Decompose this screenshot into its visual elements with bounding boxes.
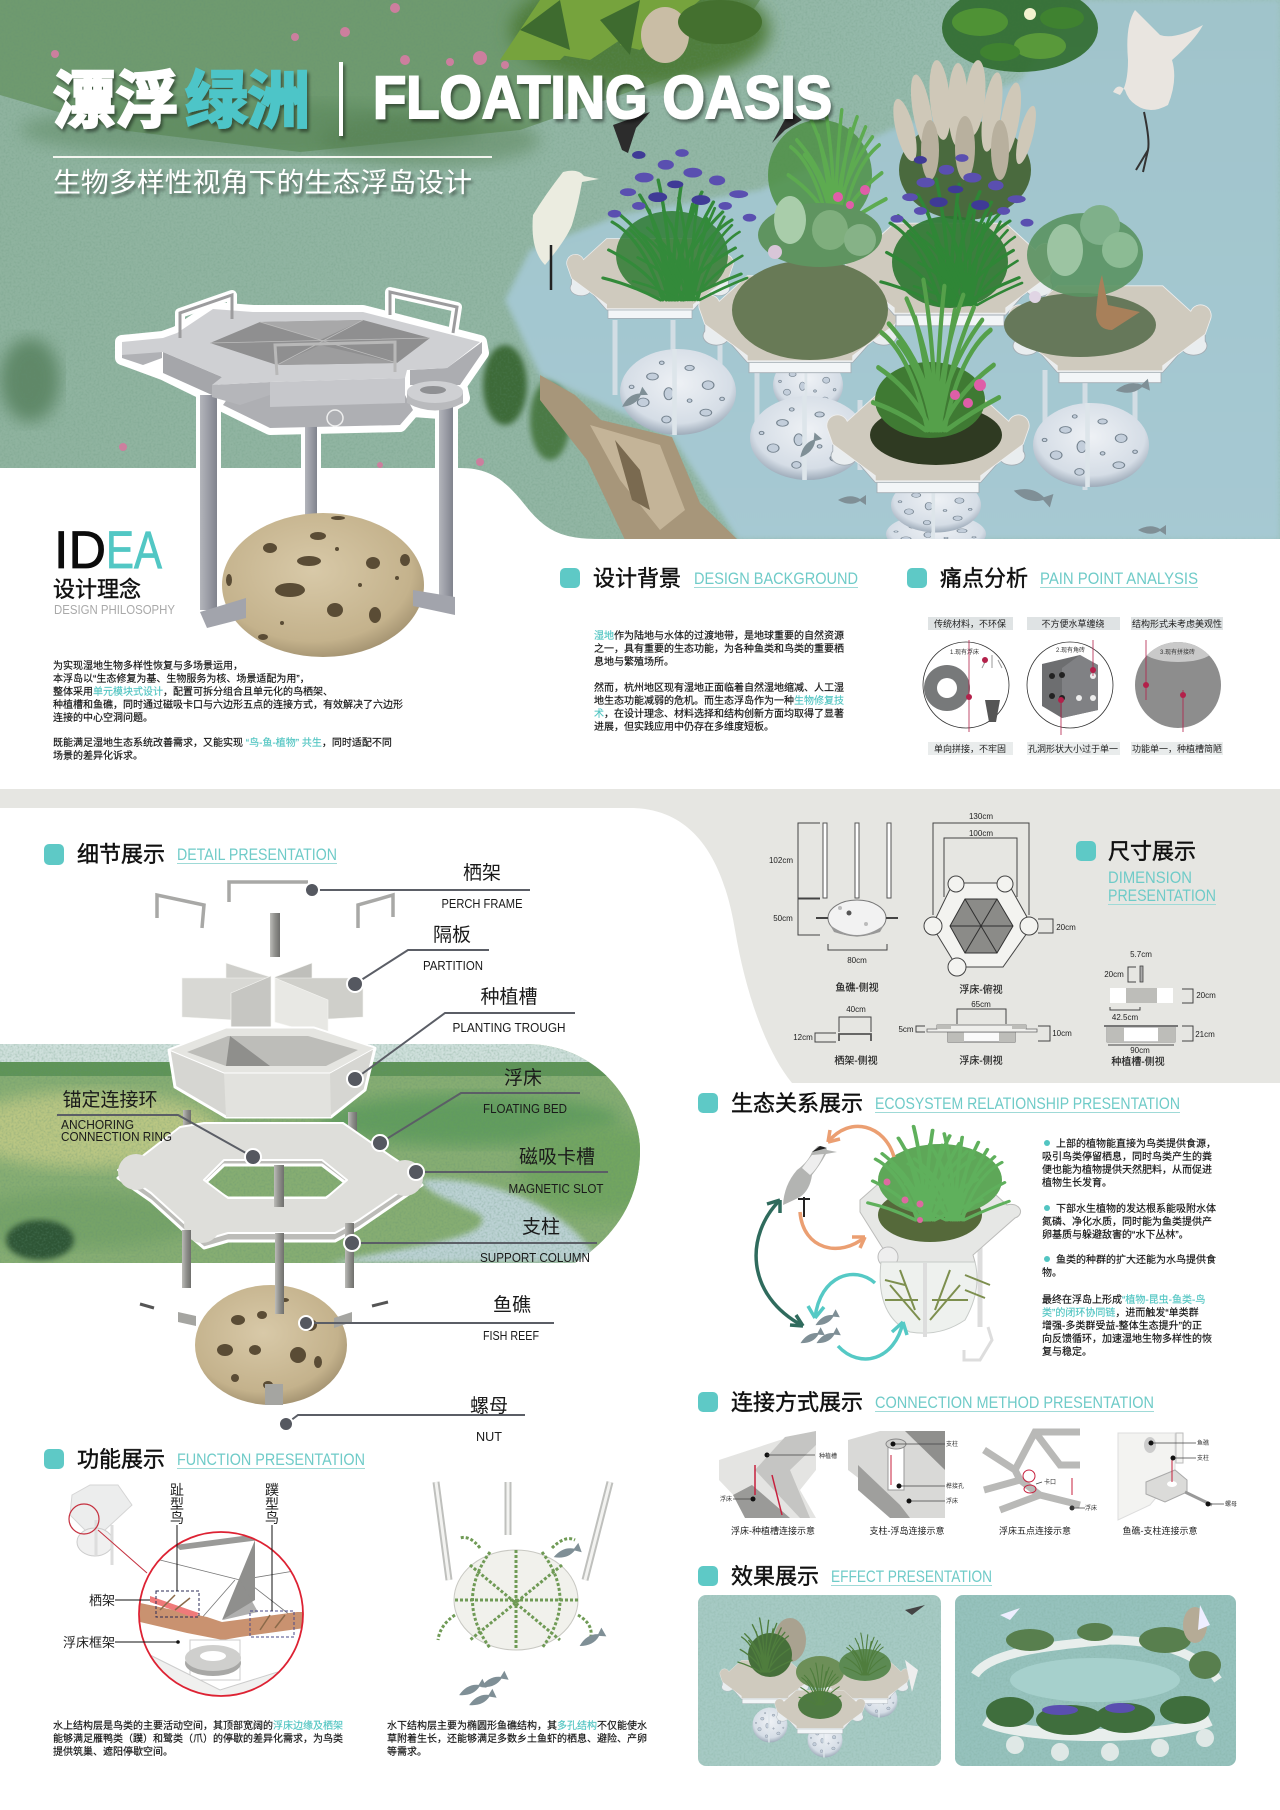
- text block: 之一，具有重要的生态功能，为各种鱼类和鸟类的重要栖: [594, 642, 844, 655]
- drawing: planting trough side view: 90cm: [1130, 1046, 1150, 1055]
- panel: dimensions: [769, 812, 1216, 1068]
- icon: pampas grass: [889, 59, 1040, 220]
- arrow: teal lower: [838, 1322, 907, 1359]
- drawing: planting trough side view: [1104, 950, 1216, 1068]
- exploded: upper pins: [183, 1110, 357, 1150]
- label: anchoring ring: CONNECTION RING: [61, 1129, 172, 1144]
- text block: concept: 本浮岛以“生态修复为基、生物服务为核、场景适配为用”，: [53, 672, 310, 685]
- diagram: reef to column: 螺母: [1225, 1500, 1237, 1508]
- drawing: floating bed side view: 65cm: [971, 1000, 991, 1009]
- icon: swallow birds: [613, 110, 802, 153]
- text block: ecosystem: [1042, 1137, 1216, 1358]
- text block: under water: [387, 1719, 647, 1758]
- image: effect view 1: [698, 1595, 941, 1766]
- icon: pink meadow flowers: [51, 3, 509, 468]
- text block: above water: 能够满足雁鸭类（蹼）和鹭类（爪）的停歇的差异化需求，为鸟类: [53, 1732, 343, 1745]
- label: anchoring ring: 锚定连接环: [62, 1089, 158, 1111]
- diagram: five-point connection: 浮床五点连接示意: [999, 1525, 1071, 1536]
- drawing: floating bed top view: 浮床-俯视: [959, 983, 1003, 996]
- diagram: ecosystem cycle: [756, 1126, 1021, 1360]
- pain point 3: 3.现有拼接砖: [1160, 648, 1195, 656]
- panel: effect presentation: [698, 1564, 1236, 1766]
- label: magnetic slot: MAGNETIC SLOT: [508, 1181, 604, 1196]
- label: toe-type bird: 趾: [170, 1482, 184, 1498]
- ring lobe: [407, 392, 463, 410]
- arrow: teal upper: [808, 1274, 875, 1318]
- label: toe-type bird: 鸟: [170, 1510, 184, 1526]
- drawing: perch side view: 40cm: [846, 1005, 866, 1014]
- icon: section marker: [1076, 841, 1096, 861]
- diagram: bed to trough: 浮床: [720, 1495, 732, 1503]
- text block: above water: 提供筑巢、遮阳停歇空间。: [53, 1745, 173, 1758]
- drawing: perch side view: 12cm: [793, 1033, 813, 1042]
- drawing: floating bed top view: 130cm: [969, 812, 993, 821]
- icon: planter: [860, 1185, 1021, 1262]
- heading english: PRESENTATION: [1108, 886, 1216, 905]
- heading english: ECOSYSTEM RELATIONSHIP PRESENTATION: [875, 1094, 1180, 1113]
- text block: ecosystem: 植物生长发育。: [1042, 1176, 1112, 1189]
- heading english: [1108, 868, 1216, 905]
- icon: section marker: [907, 568, 927, 588]
- icon: canna plants at top: [500, 0, 762, 63]
- text block: concept: 种植槽和鱼礁，同时通过磁吸卡口与六边形五点的连接方式，有效解决了六边形: [53, 698, 403, 711]
- diagram: small model: [69, 1485, 147, 1573]
- heading: 细节展示: [77, 842, 165, 867]
- title: 漂浮: [53, 67, 178, 136]
- text block: 术，在设计理念、材料选择和结构创新方面均取得了显著: [594, 707, 844, 720]
- plants and modules: [567, 59, 1211, 554]
- icon: iris plant 2: [892, 216, 1008, 308]
- icon: taro right and ground: [1004, 293, 1156, 357]
- label: web-type bird: 鸟: [265, 1510, 279, 1526]
- title: [53, 62, 832, 136]
- text block: ecosystem: 增强-多类群受益-整体生态提升”的正: [1042, 1319, 1202, 1332]
- white halo: [122, 309, 482, 428]
- label: support column: SUPPORT COLUMN: [480, 1250, 590, 1265]
- text block: ecosystem: 氮磷、净化水质，同时能为鱼类提供产: [1042, 1215, 1212, 1228]
- fish reef: [222, 513, 424, 657]
- label: nut: 螺母: [470, 1395, 508, 1417]
- panel: connection methods: [698, 1390, 1237, 1536]
- heading: 连接方式展示: [731, 1390, 863, 1415]
- subheading: DESIGN PHILOSOPHY: [54, 602, 175, 617]
- heading: IDEA: [54, 521, 163, 580]
- text block: concept: 为实现湿地生物多样性恢复与多场景运用，: [53, 659, 243, 672]
- label: floating bed: FLOATING BED: [483, 1101, 567, 1116]
- text block: under water: 草附着生长，还能够满足多数乡土鱼虾的栖息、避险、产卵: [387, 1732, 647, 1745]
- text block: 息地与繁殖场所。: [594, 655, 674, 668]
- pain point 1: 传统材料，不环保: [934, 618, 1006, 629]
- icon: front planter: [827, 396, 1029, 493]
- label: web-type bird: [265, 1482, 279, 1526]
- icon: section marker: [560, 568, 580, 588]
- heading: 效果展示: [731, 1564, 819, 1589]
- pain point 1: 1.现有浮床: [950, 648, 979, 656]
- icon: heron: [783, 1146, 837, 1205]
- diagram: reef to column: 支柱: [1197, 1454, 1209, 1462]
- icon: rear floats: [615, 320, 1135, 490]
- icon: water lily pads: [942, 0, 1098, 72]
- diagram: five-point connection: 浮床: [1085, 1504, 1097, 1512]
- text block: ecosystem: 鱼类的种群的扩大还能为水鸟提供食: [1056, 1253, 1216, 1266]
- icon: section marker: [44, 844, 64, 865]
- heading english: DESIGN BACKGROUND: [694, 569, 858, 588]
- pain point 3: 功能单一，种植槽简陋: [1132, 743, 1222, 754]
- pain point 2: [1027, 617, 1120, 755]
- label: planting trough: [347, 986, 575, 1087]
- heading: 功能展示: [77, 1447, 165, 1472]
- panel: detail presentation: [0, 842, 680, 1444]
- drawing: floating bed top view: 20cm: [1056, 923, 1076, 932]
- drawing: floating bed side view: 浮床-侧视: [959, 1054, 1003, 1067]
- text block: concept: 场景的差异化诉求。: [53, 749, 143, 762]
- label: floating bed: 浮床: [504, 1067, 542, 1089]
- drawing: floating bed side view: 5cm: [898, 1025, 914, 1034]
- wetland photo background: [0, 1044, 680, 1264]
- heading: 痛点分析: [940, 566, 1028, 591]
- heading: 生态关系展示: [731, 1091, 863, 1116]
- title: 绿洲: [185, 67, 310, 136]
- icon: egret top right: [1113, 10, 1203, 172]
- drawing: perch side view: [793, 1005, 878, 1067]
- text block: concept: 整体采用单元模块式设计，配置可拆分组合且单元化的鸟栖架、: [53, 685, 333, 698]
- pain point 2: 不方便水草缠绕: [1041, 618, 1105, 629]
- image: effect view 2: [955, 1595, 1236, 1766]
- pain point 2: 2.现有角砖: [1056, 646, 1085, 654]
- label: perch frame: PERCH FRAME: [442, 896, 523, 911]
- text block: concept: 既能满足湿地生态系统改善需求，又能实现 “鸟-鱼-植物” 共生，同时适配不同: [53, 736, 392, 749]
- text block: under water: 水下结构层主要为椭圆形鱼礁结构，其多孔结构不仅能使水: [387, 1719, 647, 1732]
- icon: fish: [622, 386, 648, 407]
- label: planting trough: PLANTING TROUGH: [452, 1020, 566, 1035]
- hero floating unit model: [122, 292, 482, 657]
- label: web-type bird: 蹼: [265, 1482, 279, 1498]
- diagram: reef to column: 鱼礁-支柱连接示意: [1122, 1525, 1198, 1536]
- text block: 地生态功能减弱的危机。而生态浮岛作为一种生物修复技: [594, 694, 844, 707]
- drawing: floating bed side view: [898, 1000, 1072, 1067]
- pain point 1: 单向拼接，不牢固: [934, 743, 1006, 754]
- diagram: bed to trough: 浮床-种植槽连接示意: [731, 1525, 815, 1536]
- icon: reeds and taro middle: [768, 120, 872, 210]
- panel: pain point analysis: [907, 566, 1223, 755]
- panel: function presentation: [44, 1447, 647, 1758]
- text block: [594, 629, 844, 733]
- diagram: underwater reef structure: [436, 1482, 610, 1710]
- panel: dimension background: [0, 789, 1280, 1083]
- diagram: magnified circle: [115, 1525, 305, 1700]
- panel: hero wetland scene: [0, 0, 1280, 554]
- diagram: column to island: [848, 1431, 964, 1536]
- text block: concept: 连接的中心空洞问题。: [53, 711, 153, 724]
- diagram: column to island: 浮床: [946, 1497, 958, 1505]
- exploded: perch frames: [157, 882, 393, 928]
- text block: ecosystem: 吸引鸟类停留栖息，同时鸟类产生的粪: [1042, 1150, 1212, 1163]
- drawing: fish reef side view: 80cm: [847, 956, 867, 965]
- heading english: DIMENSION: [1108, 868, 1192, 887]
- exploded: fish reef: [140, 1284, 388, 1405]
- drawing: floating bed top view: 100cm: [969, 829, 993, 838]
- drawing: planting trough side view: 5.7cm: [1130, 950, 1152, 959]
- drawing: planting trough side view: 42.5cm: [1112, 1013, 1138, 1022]
- diagram: column to island: 支柱-浮岛连接示意: [870, 1525, 944, 1536]
- diagram: column to island: 支柱: [946, 1440, 958, 1448]
- icon: perch rails: [180, 292, 457, 375]
- arrow: orange lower: [800, 1212, 865, 1248]
- arrow: dark green: [756, 1200, 803, 1326]
- text block: 然而，杭州地区现有湿地正面临着自然湿地缩减、人工湿: [594, 681, 844, 694]
- drawing: floating bed top view: [924, 812, 1076, 996]
- drawing: planting trough side view: 种植槽-侧视: [1111, 1055, 1165, 1068]
- text block: 进展，但实践应用中仍存在多维度短板。: [594, 720, 774, 733]
- heading english: EFFECT PRESENTATION: [831, 1567, 992, 1586]
- icon: iris plant 1: [616, 211, 728, 299]
- label: toe-type bird: 型: [170, 1496, 184, 1512]
- text block: ecosystem: 上部的植物能直接为鸟类提供食源，: [1056, 1137, 1216, 1150]
- pain point 3: 结构形式未考虑美观性: [1132, 618, 1222, 629]
- label: nut: NUT: [476, 1429, 502, 1444]
- icon: fish school: [798, 1309, 841, 1347]
- label: anchoring ring: [57, 1089, 261, 1165]
- text block: ecosystem: 最终在浮岛上形成“植物-昆虫-鱼类-鸟: [1042, 1293, 1205, 1306]
- drawing: fish reef side view: 102cm: [769, 856, 793, 865]
- heading english: DETAIL PRESENTATION: [177, 845, 337, 864]
- text block: ecosystem: 类”的闭环协同链，进而触发“单类群: [1042, 1306, 1199, 1319]
- icon: root sphere: [880, 1262, 977, 1333]
- icon: section marker: [698, 1392, 718, 1412]
- drawing: planting trough side view: 20cm: [1196, 991, 1216, 1000]
- drawing: fish reef side view: 50cm: [773, 914, 793, 923]
- label: anchoring ring: ANCHORING: [61, 1117, 134, 1132]
- text block: ecosystem: 下部水生植物的发达根系能吸附水体: [1056, 1202, 1216, 1215]
- heading: 设计理念: 设计理念: [53, 577, 141, 602]
- text block: ecosystem: 物。: [1042, 1266, 1062, 1279]
- text block: above water: [53, 1719, 343, 1758]
- label: support column: [344, 1216, 597, 1265]
- label: magnetic slot: [408, 1146, 608, 1196]
- label: partition: PARTITION: [423, 958, 483, 973]
- diagram: five-point connection: [984, 1432, 1097, 1536]
- icon: section marker: [698, 1093, 718, 1113]
- label: toe-type bird: [170, 1482, 184, 1526]
- text block: above water: 水上结构层是鸟类的主要活动空间，其顶部宽阔的浮床边缘及栖架: [53, 1719, 343, 1732]
- drawing: planting trough side view: 21cm: [1195, 1030, 1215, 1039]
- label: partition: 隔板: [433, 924, 471, 946]
- exploded: partition: [182, 963, 363, 1045]
- exploded: floating bed: [118, 1123, 423, 1248]
- heading: 设计背景: [593, 566, 681, 591]
- pain point 2: 孔洞形状大小过于单一: [1028, 743, 1118, 754]
- text block: under water: 等需求。: [387, 1745, 427, 1758]
- heading english: FUNCTION PRESENTATION: [177, 1450, 365, 1469]
- label: nut: [279, 1395, 525, 1444]
- label: partition: [347, 924, 489, 992]
- text block: ecosystem: 向反馈循环，加速湿地生物多样性的恢: [1042, 1332, 1212, 1345]
- icon: supports: [978, 1243, 982, 1327]
- label: fish reef: FISH REEF: [483, 1328, 539, 1343]
- text block: ecosystem: 复与稳定。: [1042, 1345, 1092, 1358]
- diagram: bed to trough: [719, 1431, 837, 1536]
- icon: anchor blocks: [200, 598, 246, 628]
- panel: idea: [53, 521, 403, 762]
- subtitle: 生物多样性视角下的生态浮岛设计: [53, 168, 472, 198]
- text block: concept: [53, 659, 403, 762]
- label: perch frame: 栖架: [463, 862, 501, 884]
- drawing: planting trough side view: 20cm: [1104, 970, 1124, 979]
- label: planting trough: 种植槽: [480, 986, 538, 1008]
- panel: design background: [560, 566, 858, 733]
- text block: ecosystem: 便也能为植物提供天然肥料，从而促进: [1042, 1163, 1212, 1176]
- drawing: fish reef side view: [769, 823, 898, 994]
- heading english: PAIN POINT ANALYSIS: [1040, 569, 1198, 588]
- label: fish reef: [299, 1294, 554, 1343]
- label: magnetic slot: 磁吸卡槽: [519, 1146, 595, 1168]
- icon: section marker: [698, 1566, 718, 1586]
- exploded: planting trough: [169, 1028, 375, 1117]
- heading: IDEA: EA: [106, 521, 163, 580]
- heading english: CONNECTION METHOD PRESENTATION: [875, 1393, 1154, 1412]
- heading: IDEA: ID: [54, 521, 106, 580]
- text block: 湿地作为陆地与水体的过渡地带，是地球重要的自然资源: [594, 629, 844, 642]
- diagram: bed to trough: 种植槽: [819, 1452, 837, 1460]
- drawing: floating bed side view: 10cm: [1052, 1029, 1072, 1038]
- label: frame: 浮床框架: [63, 1635, 115, 1650]
- text block: ecosystem: 卵基质与躲避敌害的“水下丛林”。: [1042, 1228, 1189, 1241]
- drawing: perch side view: 栖架-侧视: [834, 1054, 878, 1067]
- floating bed: [223, 395, 413, 428]
- label: floating bed: [372, 1067, 580, 1151]
- arrow: orange upper: [828, 1126, 894, 1157]
- diagram: reef to column: [1118, 1433, 1237, 1536]
- label: web-type bird: 型: [265, 1496, 279, 1512]
- exploded: lower columns: [182, 1165, 354, 1391]
- icon: egret left: [532, 171, 599, 290]
- title rule: [53, 156, 492, 158]
- drawing: fish reef side view: 鱼礁-侧视: [835, 981, 879, 994]
- label: perch: 栖架: [89, 1593, 115, 1608]
- label: perch frame: [305, 862, 530, 911]
- pain point 1: [923, 617, 1013, 755]
- panel: ecosystem relationship: [698, 1091, 1216, 1360]
- title: FLOATING OASIS: [373, 64, 832, 131]
- diagram: five-point connection: 卡口: [1044, 1478, 1056, 1486]
- label: support column: 支柱: [522, 1216, 560, 1238]
- label: fish reef: 鱼礁: [493, 1294, 531, 1316]
- exploded: center post: [270, 913, 280, 957]
- diagram: reef to column: 鱼礁: [1197, 1439, 1209, 1447]
- pain point 3: [1131, 617, 1223, 755]
- icon: section marker: [44, 1449, 64, 1469]
- icon: rocky shoreline: [540, 375, 738, 540]
- diagram: column to island: 榫接孔: [946, 1482, 964, 1490]
- heading: 尺寸展示: [1108, 839, 1196, 864]
